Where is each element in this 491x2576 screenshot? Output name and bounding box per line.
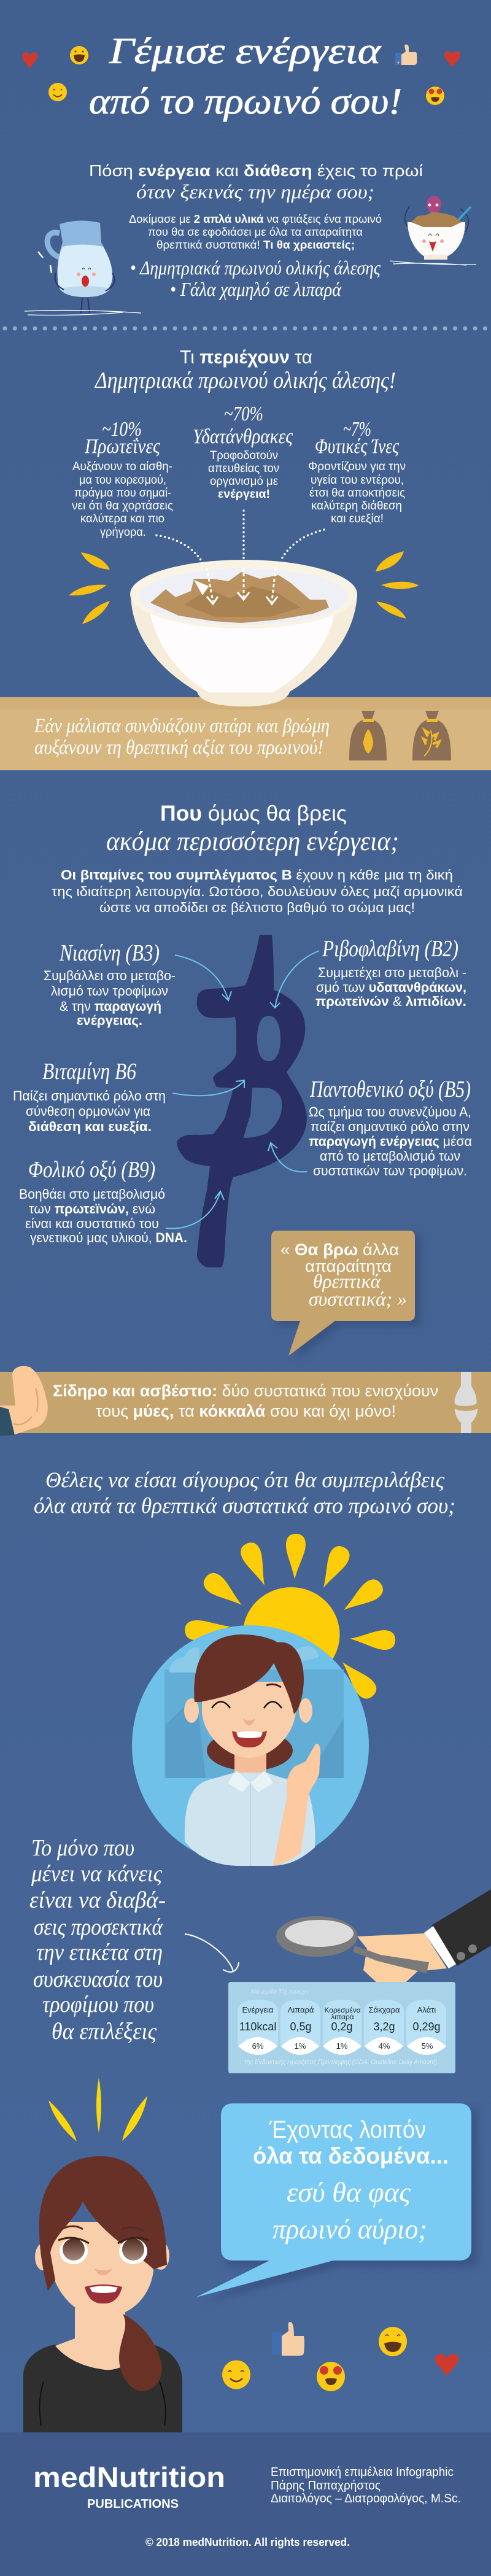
B-complex intro text: της ιδιαίτερη λειτουργία. Ωστόσο, δουλεύουν όλες μαζί αρμονικά xyxy=(52,884,463,899)
icon: thumbs up xyxy=(272,2322,304,2356)
icon: heart left xyxy=(22,52,37,69)
vitamin: pantothenic acid B5 xyxy=(309,1077,472,1178)
text: read the label: την ετικέτα στη xyxy=(36,1940,163,1965)
footer band xyxy=(0,2432,491,2576)
label percentage lenses xyxy=(238,2037,446,2055)
text: read the label: συσκευασία του xyxy=(33,1967,163,1992)
column: fibre: υγεία του εντέρου, xyxy=(311,474,404,487)
heading: want to be sure: Θέλεις να είσαι σίγουρος ότι θα συμπεριλάβεις xyxy=(45,1468,444,1492)
label values: 5% xyxy=(422,2041,433,2051)
label values: Αλάτι xyxy=(417,2005,436,2014)
label values: Σάκχαρα xyxy=(369,2005,400,2014)
tan banner: oats and wheat xyxy=(0,697,491,770)
yellow burst above woman xyxy=(48,2078,147,2141)
icon: wheat sack xyxy=(349,711,387,760)
text: read the label: θα επιλέξεις xyxy=(52,2019,157,2044)
intro heading: όταν ξεκινάς την ημέρα σου; xyxy=(136,180,374,203)
arrow: B5 xyxy=(268,1143,307,1172)
vitamin: B6: Βιταμίνη Β6 xyxy=(42,1059,136,1085)
vitamin: riboflavin B2: σμό των υδατανθράκων, xyxy=(316,980,466,995)
dotted divider xyxy=(5,327,491,330)
speech bubble: blue: πρωινό αύριο; xyxy=(273,2213,427,2245)
label values: 1% xyxy=(295,2041,306,2051)
footer credits xyxy=(271,2466,461,2505)
icon: oat sack xyxy=(412,711,451,760)
banner text: Εάν μάλιστα συνδυάζουν σιτάρι και βρώμη xyxy=(34,715,330,737)
column: carbohydrates: Υδατάνθρακες xyxy=(193,425,293,448)
text: read the label: τροφίμου που xyxy=(42,1992,154,2017)
heading: where to find more energy: Που όμως θα βρεις xyxy=(160,802,347,826)
icon: heart xyxy=(435,2354,458,2377)
label values: 0,2g xyxy=(331,2021,353,2033)
column: carbohydrates: απευθείας τον xyxy=(208,462,279,475)
banner text xyxy=(34,715,330,759)
icon: milk jug character xyxy=(38,220,115,313)
scribble under bowl xyxy=(390,261,476,265)
column: proteins: πράγμα που σημαί- xyxy=(74,487,171,500)
vitamin: B6: Παίζει σημαντικό ρόλο στη xyxy=(13,1088,166,1104)
arrow: B9 xyxy=(166,1191,224,1229)
icon: laughing face xyxy=(379,2327,407,2356)
speech bubble: blue xyxy=(196,2103,477,2303)
label values: 3,2g xyxy=(373,2021,395,2033)
footer logo: medNutrition xyxy=(33,2461,225,2493)
vitamin: folic acid B9: είναι και συστατικό του xyxy=(25,1216,159,1231)
vitamin: riboflavin B2: πρωτεϊνών & λιπιδίων. xyxy=(315,994,466,1009)
column: fibre: και ευεξία! xyxy=(331,512,384,525)
column: carbohydrates: Τροφοδοτούν xyxy=(210,449,278,462)
ingredient list: • Δημητριακά πρωινού ολικής άλεσης xyxy=(130,257,381,279)
column: fibre: Φυτικές Ίνες xyxy=(315,435,399,458)
intro heading: Πόση ενέργεια και διάθεση έχεις το πρωί xyxy=(89,161,423,180)
banner text: αυξάνουν τη θρεπτική αξία του πρωινού! xyxy=(34,737,323,759)
column: proteins: ~10% xyxy=(102,418,142,441)
vitamin: riboflavin B2 xyxy=(315,936,466,1009)
vitamin: pantothenic acid B5: Ως τμήμα του συνενζύμου Α, xyxy=(309,1104,471,1120)
label values: 110kcal xyxy=(239,2021,276,2033)
column: carbohydrates xyxy=(193,403,293,501)
text: read the label xyxy=(29,1835,166,2044)
heading: where to find more energy xyxy=(106,802,399,856)
label values: Κορεσμένα xyxy=(324,2006,361,2014)
heading: want to be sure xyxy=(34,1468,455,1518)
heading: what cereals contain: Τι περιέχουν τα xyxy=(180,346,312,368)
footer credits: Πάρης Παπαχρήστος xyxy=(271,2479,381,2493)
column: proteins: καλύτερα και πιο xyxy=(80,512,164,525)
illustration: smiling woman in blue circle xyxy=(132,1625,369,1866)
arrow: B6 xyxy=(172,1080,244,1096)
text: read the label: μένει να κάνεις xyxy=(31,1861,163,1887)
label values: 6% xyxy=(252,2041,264,2051)
B-complex intro text xyxy=(52,867,463,915)
banner top strip xyxy=(0,697,491,710)
icon: flexed arm xyxy=(0,1366,48,1436)
label heading: Μια μερίδα 30g περιέχει: xyxy=(251,1988,309,1995)
icon: cereal bowl xyxy=(130,560,357,706)
vitamin: pantothenic acid B5: παραγωγή ενέργειας μέσα xyxy=(309,1134,472,1149)
label values xyxy=(239,2005,441,2051)
label values: 0,29g xyxy=(412,2021,441,2033)
arrow: to label xyxy=(185,1934,239,1972)
vitamin: B6: διάθεση και ευεξία. xyxy=(28,1119,152,1134)
arrow: B2 xyxy=(270,951,319,1008)
vitamin: folic acid B9: Βοηθάει στο μεταβολισμό xyxy=(19,1186,165,1202)
B-complex intro text: ώστε να αποδίδει σε βέλτιστο βαθμό το σώμα μας! xyxy=(99,900,415,915)
icon: cereal bowl character xyxy=(405,196,471,260)
scribble under jug xyxy=(25,311,141,315)
label values: 4% xyxy=(379,2041,390,2051)
vitamin: pantothenic acid B5: από το μεταβολισμό των xyxy=(320,1148,460,1164)
ingredient list xyxy=(130,257,381,300)
footer logo: PUBLICATIONS xyxy=(87,2497,179,2511)
footer logo xyxy=(33,2461,225,2511)
vitamin: folic acid B9: των πρωτεϊνών, ενώ xyxy=(29,1201,155,1216)
speech bubble: other nutrients: « Θα βρω άλλα xyxy=(280,1240,399,1259)
icon: smiling face xyxy=(48,83,67,101)
vitamin: pantothenic acid B5: παίζει σημαντικό ρόλο στην xyxy=(311,1119,470,1134)
illustration: woman speaking xyxy=(23,2156,182,2432)
label values: Λιπαρά xyxy=(288,2005,314,2014)
intro text: Δοκίμασε με 2 απλά υλικά να φτιάξεις ένα πρωινό xyxy=(129,213,382,225)
speech bubble: other nutrients: θρεπτικά xyxy=(313,1270,381,1292)
column: fibre: Φροντίζουν για την xyxy=(308,460,406,473)
footer credits: Διαιτολόγος – Διατροφολόγος, M.Sc. xyxy=(271,2492,461,2505)
column: proteins: Πρωτεΐνες xyxy=(84,435,160,458)
speech bubble: blue: Έχοντας λοιπόν xyxy=(269,2116,426,2143)
speech bubble: other nutrients xyxy=(271,1231,421,1361)
text: read the label: σεις προσεκτικά xyxy=(34,1914,163,1940)
label values: Ενέργεια xyxy=(242,2005,274,2014)
speech bubble: other nutrients: απαραίτητα xyxy=(305,1257,392,1275)
vitamin: riboflavin B2: Ριβοφλαβίνη (Β2) xyxy=(322,936,458,962)
speech bubble: other nutrients: συστατικά; » xyxy=(309,1288,407,1310)
column: fibre: έτσι θα αποκτήσεις xyxy=(309,487,405,500)
title: Γέμισε ενέργεια xyxy=(109,31,382,71)
vitamin: niacin B3: Νιασίνη (Β3) xyxy=(59,940,160,966)
vitamin: riboflavin B2: Συμμετέχει στο μεταβολι - xyxy=(318,965,466,980)
banner text xyxy=(53,1382,438,1420)
column: proteins xyxy=(72,418,173,539)
dotted arrows to bowl xyxy=(157,511,324,560)
yellow rays right of bowl xyxy=(376,551,419,619)
intro text: θρεπτικά συστατικά! Τι θα χρειαστείς; xyxy=(157,239,355,251)
intro text xyxy=(129,213,382,251)
heading: want to be sure: όλα αυτά τα θρεπτικά συστατικά στο πρωινό σου; xyxy=(34,1493,455,1518)
banner text: τους μύες, τα κόκκαλά σου και όχι μόνο! xyxy=(96,1402,396,1420)
column: fibre: ~7% xyxy=(343,418,371,441)
vitamin: niacin B3: λισμό των τροφίμων xyxy=(51,983,168,999)
label values: 1% xyxy=(336,2041,348,2051)
title: από το πρωινό σου! xyxy=(89,81,402,122)
icon: heart eyes face xyxy=(317,2362,345,2391)
icon: thumbs up xyxy=(395,44,417,65)
label values: 0,5g xyxy=(290,2021,312,2033)
B-complex intro text: Οι βιταμίνες του συμπλέγματος Β έχουν η κάθε μια τη δική xyxy=(61,867,453,883)
speech bubble: blue: όλα τα δεδομένα... xyxy=(253,2143,449,2168)
label footnote: της Ενδεικτικής Ημερήσιας Πρόσληψης (GDA, Guideline Daily Amount) xyxy=(244,2059,437,2066)
column: proteins: νει ότι θα χορτάσεις xyxy=(72,500,173,512)
label column backgrounds xyxy=(238,2000,446,2046)
vitamin: pantothenic acid B5: συστατικών των τροφίμων. xyxy=(313,1163,467,1178)
speech bubble: blue: εσύ θα φας xyxy=(287,2176,411,2208)
vitamin: niacin B3: Συμβάλλει στο μεταβο- xyxy=(44,968,176,983)
large letter B xyxy=(177,935,307,1267)
vitamin: niacin B3: & την παραγωγή xyxy=(60,999,161,1014)
heading: what cereals contain xyxy=(94,346,396,393)
banner text: Σίδηρο και ασβέστιο: δύο συστατικά που ενισχύουν xyxy=(53,1382,438,1400)
tan banner: iron and calcium xyxy=(0,1372,491,1433)
yellow rays left of bowl xyxy=(69,552,110,624)
vitamin: folic acid B9: γενετικού μας υλικού, DNA. xyxy=(30,1230,187,1245)
vitamin: niacin B3 xyxy=(44,940,176,1028)
column: carbohydrates: οργανισμό με xyxy=(210,475,279,488)
copyright: © 2018 medNutrition. All rights reserved. xyxy=(145,2536,350,2548)
vitamin: B6 xyxy=(13,1059,166,1134)
icon: bone joint xyxy=(455,1372,477,1433)
title xyxy=(89,31,402,122)
text: read the label: είναι να διαβά- xyxy=(29,1887,166,1913)
column: proteins: γρήγορα. xyxy=(100,526,146,539)
column: carbohydrates: ενέργεια! xyxy=(218,488,270,501)
vitamin: folic acid B9 xyxy=(19,1157,187,1245)
heading: where to find more energy: ακόμα περισσότερη ενέργεια; xyxy=(106,826,399,856)
heading: what cereals contain: Δημητριακά πρωινού ολικής άλεσης! xyxy=(94,368,396,393)
ingredient list: • Γάλα χαμηλό σε λιπαρά xyxy=(170,278,342,300)
label values: λιπαρά xyxy=(331,2013,354,2021)
column: fibre: καλύτερη διάθεση xyxy=(311,500,402,512)
icon: smiling face xyxy=(222,2361,250,2389)
icon: laughing face xyxy=(70,46,88,64)
column: carbohydrates: ~70% xyxy=(224,403,263,425)
vitamin: B6: σύνθεση ορμονών για xyxy=(26,1104,150,1119)
vitamin: folic acid B9: Φολικό οξύ (Β9) xyxy=(28,1157,155,1183)
text: read the label: Το μόνο που xyxy=(31,1835,134,1861)
column: proteins: Αυξάνουν το αίσθη- xyxy=(72,460,172,473)
icon: sun xyxy=(184,1533,396,1703)
intro text: που θα σε εφοδιάσει με όλα τα απαραίτητα xyxy=(148,226,363,238)
intro heading xyxy=(89,161,423,203)
icon: hand with magnifying glass xyxy=(276,1889,491,1992)
column: fibre xyxy=(308,418,406,525)
vitamin: niacin B3: ενέργειας. xyxy=(77,1013,142,1028)
nutrition label card xyxy=(228,1982,455,2073)
footer credits: Επιστημονική επιμέλεια Infographic xyxy=(271,2466,454,2479)
arrow: B3 xyxy=(175,955,231,1000)
column: proteins: μα του κορεσμού, xyxy=(79,474,166,487)
icon: heart right xyxy=(444,51,460,68)
icon: heart eyes face xyxy=(426,87,444,105)
